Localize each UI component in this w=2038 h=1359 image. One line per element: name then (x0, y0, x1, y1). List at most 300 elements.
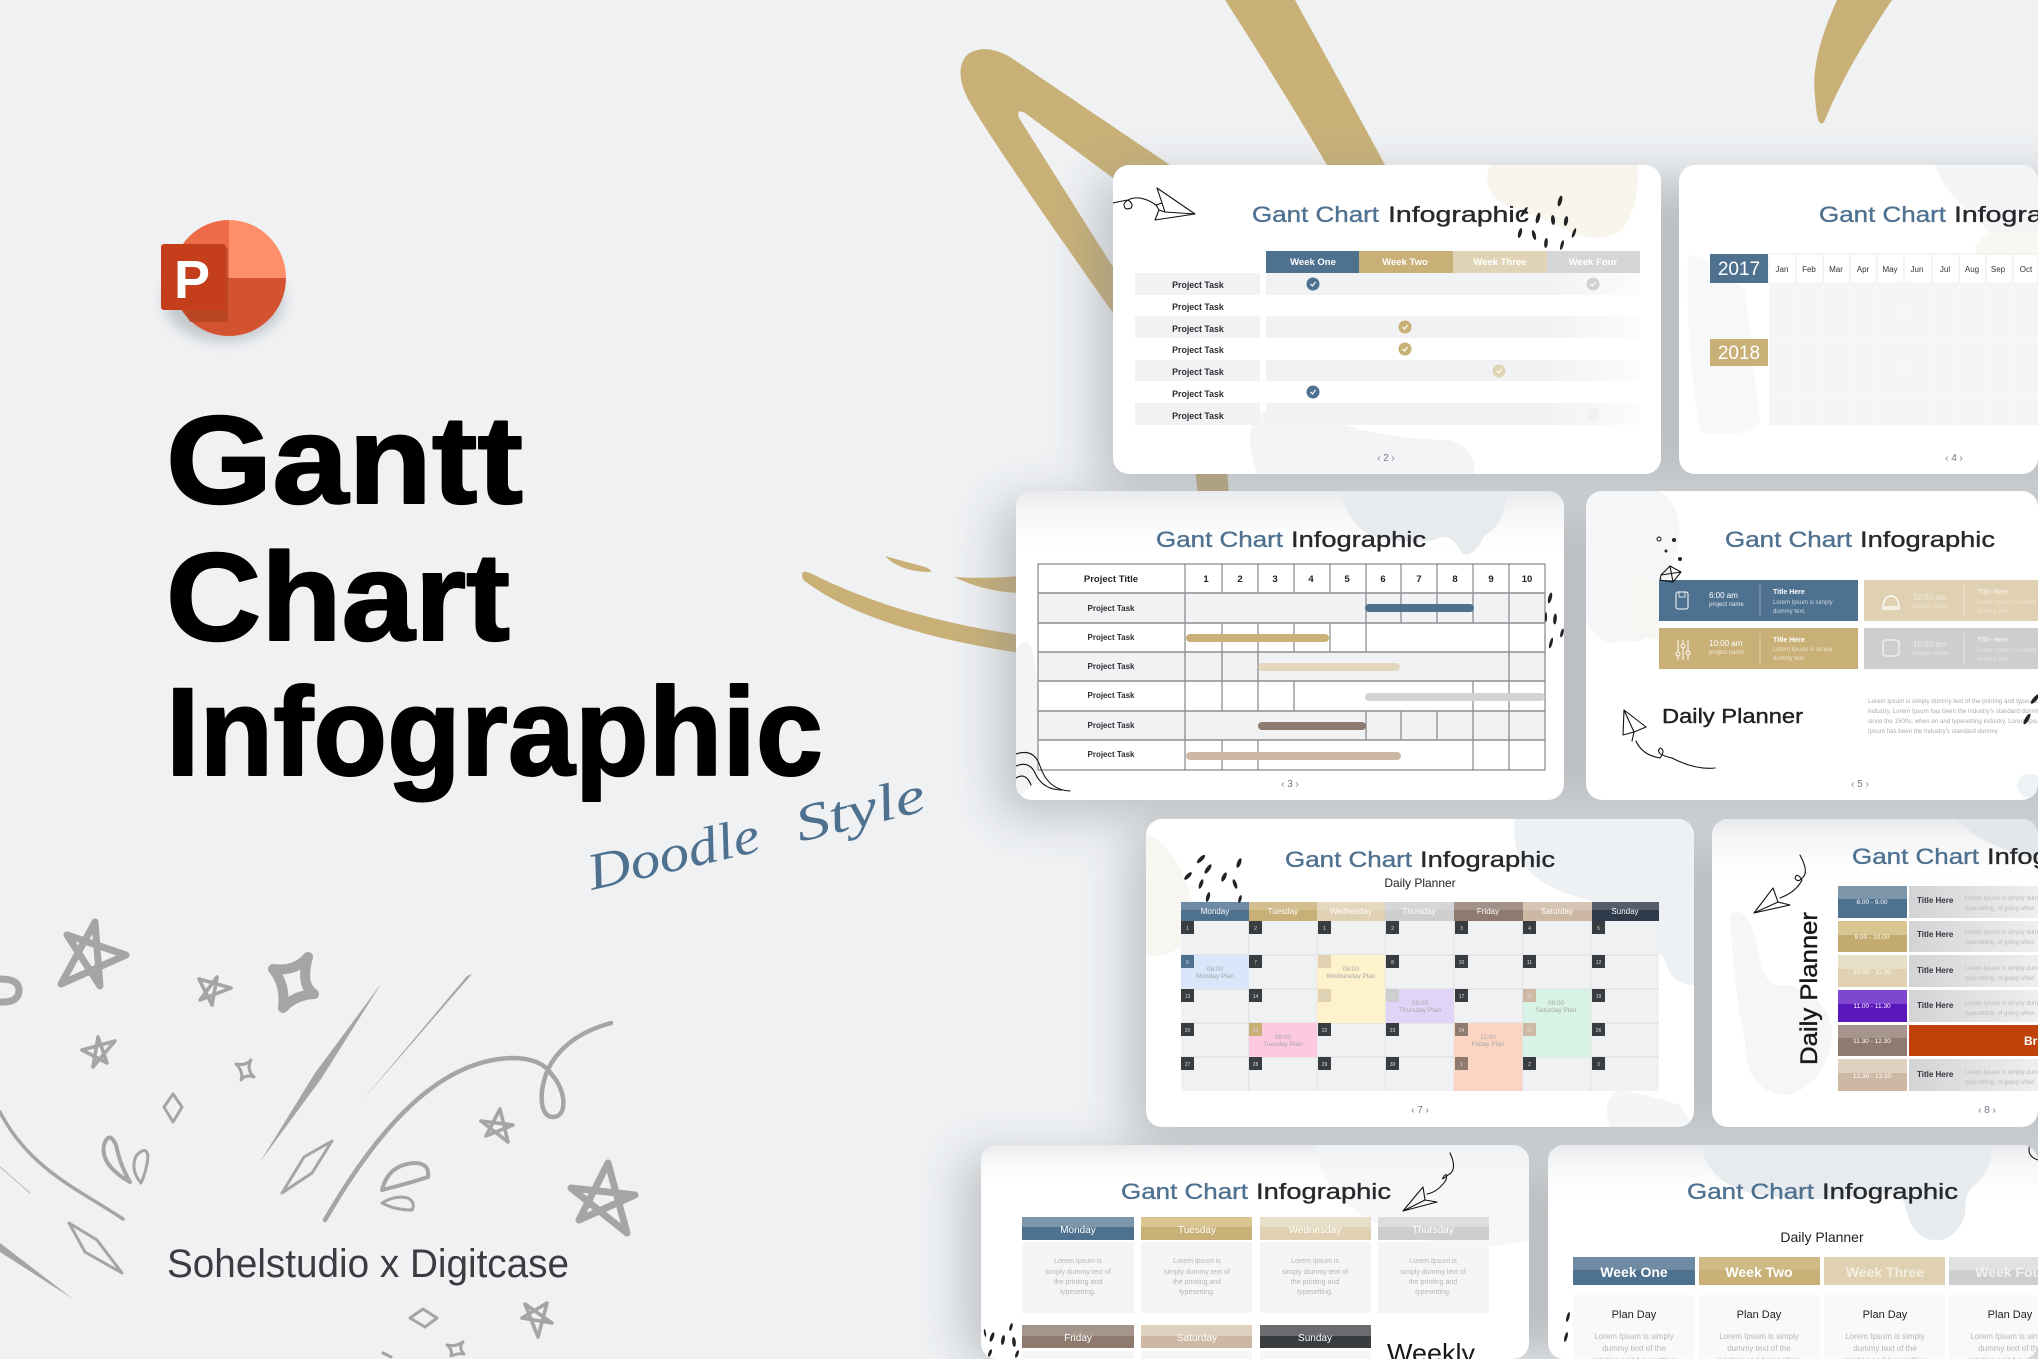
card 2 blobs (1935, 165, 2038, 254)
card 3 title: Infographic (1291, 527, 1426, 552)
subtitle: doodle style (581, 766, 931, 902)
card 7 lorem text: Lorem Ipsum is (1173, 1258, 1221, 1265)
slide card 6: daily schedule (1712, 819, 2038, 1127)
table header labels (1084, 576, 1532, 584)
calendar header: Thursday (1402, 907, 1436, 916)
card 7 weekday headers bottom: Friday (1064, 1333, 1092, 1344)
card 8 shading (1548, 1145, 2038, 1205)
tile: 6:00 am: Title Here (1773, 589, 1805, 596)
tile: 12:00 am: Title Here (1977, 589, 2009, 596)
card 7 paper plane (1403, 1153, 1454, 1211)
card 5 blobs (1146, 819, 1694, 1127)
calendar day numbers: 26 (1596, 1028, 1601, 1034)
card 1 title (1253, 206, 1528, 227)
doodle stars (61, 922, 635, 1337)
calendar day numbers: 28 (1253, 1062, 1258, 1068)
card 1 task labels: Project Task (1172, 280, 1224, 290)
schedule row text: typesetting, of going when (1965, 976, 2035, 982)
card 8 lorem text: Lorem Ipsum is simply (1594, 1332, 1674, 1341)
card 6 blobs (1730, 819, 2038, 1095)
card 1 task labels: Project Task (1172, 324, 1224, 334)
credit line: Sohelstudio x Digitcase (167, 1242, 569, 1286)
card 1 task labels: Project Task (1172, 345, 1224, 355)
card 2 month header: Jun (1911, 265, 1923, 274)
card 7 title: Gant Chart (1121, 1179, 1248, 1204)
tile: 10:00 am: project name (1709, 650, 1744, 656)
slide card 8: week plan (1548, 1145, 2038, 1359)
tile: 15:00 am: 15:00 am (1913, 640, 1947, 649)
calendar day numbers: 6 (1186, 960, 1189, 966)
card 2 month header: Aug (1965, 265, 1979, 274)
card 7 lorem text: the printing and (1291, 1279, 1339, 1286)
card 3 corner blob (1016, 642, 1042, 796)
table task labels: Project Task (1088, 750, 1135, 759)
card 2 month header: Jan (1776, 265, 1788, 274)
slide card 1: week gantt (1113, 165, 1662, 474)
tile: 10:00 am (1659, 628, 1858, 669)
card 8 panel (1548, 1145, 2038, 1359)
card 8 blob (1702, 1145, 1992, 1240)
card 7 lorem text: the printing and (1409, 1279, 1457, 1286)
table header labels: 8 (1452, 574, 1458, 585)
card 6 paper plane (1754, 855, 1805, 913)
card 3 title (1157, 530, 1426, 552)
card 8 seed marks (1563, 1312, 1571, 1342)
calendar day numbers: 7 (1254, 960, 1257, 966)
card 1 week header: Week Four (1569, 257, 1617, 268)
tile: 6:00 am: project name (1709, 602, 1744, 608)
card 1 task labels: Project Task (1172, 367, 1224, 377)
card 5 title: Infographic (1420, 847, 1555, 872)
card 2 grid (1769, 284, 2038, 425)
tile: 15:00 am: project name (1913, 651, 1948, 657)
card 8 loop doodle (2029, 1145, 2038, 1160)
card 4 seed marks (2022, 693, 2038, 725)
calendar day numbers: 11 (1527, 960, 1532, 966)
card 2 month header: May (1882, 265, 1898, 274)
card 7 shading (981, 1145, 1530, 1247)
calendar day numbers: 30 (1390, 1062, 1395, 1068)
calendar plan labels: Thursday Plan (1399, 1007, 1441, 1014)
schedule row text: typesetting, of going when (1965, 906, 2035, 912)
table header labels: 6 (1380, 574, 1386, 585)
tile: 12:00 am: project name (1913, 604, 1948, 610)
card 2 month header: Jul (1940, 265, 1950, 274)
logo circle quadrants (229, 220, 286, 278)
card 1 paper plane (1113, 188, 1195, 220)
table header labels: 1 (1203, 574, 1209, 585)
calendar plan labels: Tuesday Plan (1263, 1041, 1303, 1048)
card 4 title: Infographic (1860, 527, 1995, 552)
tile: 15:00 am: dummy text. (1977, 657, 2010, 663)
grey doodles (0, 922, 635, 1357)
calendar header: Friday (1477, 907, 1499, 916)
schedule row text: Title Here (1917, 930, 1954, 939)
tile: 12:00 am: Lorem Ipsum is simply (1977, 600, 2037, 606)
card 7 lorem text: simply dummy text of (1400, 1269, 1466, 1276)
card 8 subheading: Daily Planner (1780, 1229, 1864, 1245)
card 8 plan headings: Plan Day (1988, 1309, 2033, 1321)
card 2 panel (1679, 165, 2038, 474)
slide card 3: project table (1016, 491, 1565, 800)
card 1 task labels: Project Task (1172, 411, 1224, 421)
calendar cell fills (1181, 921, 1659, 1091)
card 8 week headers (1573, 1257, 2038, 1285)
table task labels: Project Task (1088, 691, 1135, 700)
schedule time blocks (1838, 886, 1907, 1091)
calendar day numbers: 1 (1323, 926, 1326, 932)
card 4 page number: ‹ 5 › (1851, 779, 1869, 790)
card 4 paragraph: Ipsum has been the industry's standard dummy (1868, 728, 1999, 735)
slide card 7: weekly boxes (981, 1145, 1530, 1359)
card 1 panel (1113, 165, 1661, 474)
tile: 15:00 am: Lorem Ipsum is simply (1977, 648, 2037, 654)
card 6 panel (1712, 819, 2038, 1127)
card 1 page number: ‹ 2 › (1377, 453, 1395, 464)
tile: 10:00 am: Lorem Ipsum is simply (1773, 647, 1833, 653)
card 7 lorem text: simply dummy text of (1282, 1269, 1348, 1276)
slide card 5: monthly calendar (1146, 819, 1694, 1127)
card 5 title (1285, 847, 1555, 872)
card 7 weekday headers bottom (1022, 1325, 1371, 1348)
card 3 shading (1016, 491, 1564, 518)
card 8 lorem text: Lorem Ipsum is simply (1719, 1332, 1799, 1341)
calendar plan labels: 08:00 (1207, 966, 1224, 973)
calendar day badges (1181, 921, 1605, 1070)
card 3 seed marks (1545, 592, 1565, 649)
card 5 panel (1146, 819, 1694, 1127)
card 8 plan headings: Plan Day (1863, 1309, 1908, 1321)
schedule row text: Title Here (1917, 1070, 1954, 1079)
calendar plan labels: Saturday Plan (1536, 1007, 1577, 1014)
calendar day numbers: 5 (1597, 926, 1600, 932)
card 7 lorem text: simply dummy text of (1164, 1269, 1230, 1276)
schedule time labels (1853, 899, 1892, 1080)
calendar day numbers: 24 (1459, 1028, 1464, 1034)
card 4 paper plane (1623, 710, 1715, 768)
card 7 lorem text: typesetting. (1415, 1289, 1451, 1296)
calendar plan labels: Friday Plan (1472, 1041, 1505, 1048)
card 2 month header: Oct (2020, 265, 2033, 274)
calendar plan labels: 08:00 (1412, 1000, 1429, 1007)
calendar plan labels: 08:00 (1548, 1000, 1565, 1007)
schedule row text: Title Here (1917, 896, 1954, 905)
calendar plan labels: 08:00 (1343, 966, 1360, 973)
schedule row text: typesetting, of going when (1965, 940, 2035, 946)
table header labels: 3 (1272, 574, 1278, 585)
calendar day numbers: 3 (1597, 1062, 1600, 1068)
gantt table (1038, 564, 1545, 770)
card 4 dots and gem (1657, 537, 1682, 582)
schedule time labels: 11.00 - 11.30 (1853, 1003, 1891, 1010)
table header labels: Project Title (1084, 574, 1138, 585)
schedule row text (1917, 896, 2038, 1086)
card 5 page number: ‹ 7 › (1411, 1105, 1429, 1116)
card 7 weekday headers top: Thursday (1412, 1225, 1454, 1236)
card 2 month header: Mar (1829, 265, 1843, 274)
calendar day numbers: 19 (1596, 994, 1601, 1000)
card 3 wave doodle (1016, 752, 1070, 791)
table header labels: 5 (1344, 574, 1350, 585)
card 6 title: Gant Chart (1852, 844, 1979, 869)
card drop shadows (965, 178, 2038, 1359)
calendar day numbers: 13 (1185, 994, 1190, 1000)
schedule time labels: 10.00 - 11.00 (1853, 969, 1891, 976)
card 4 title (1725, 527, 1995, 552)
subtitle: doodle style: Doodle (581, 807, 765, 902)
doodle sparkles and diamonds (69, 957, 464, 1356)
schedule time labels: 12.30 - 13.30 (1853, 1073, 1892, 1080)
card 2 month header: Apr (1857, 265, 1870, 274)
card 7 lorem text: Lorem Ipsum is (1409, 1258, 1457, 1265)
card 7 lorem text: typesetting. (1179, 1289, 1215, 1296)
calendar day numbers: 1 (1186, 926, 1189, 932)
schedule row text: typesetting, of going when (1965, 1080, 2035, 1086)
table task labels: Project Task (1088, 662, 1135, 671)
schedule time labels: 11.30 - 12.30 (1853, 1038, 1891, 1045)
table header labels: 9 (1488, 574, 1494, 585)
calendar day numbers: 7 (1323, 960, 1326, 966)
calendar day numbers: 14 (1253, 994, 1258, 1000)
card 1 title: Gant Chart (1252, 202, 1379, 227)
title line 2: Chart (166, 528, 510, 667)
calendar day numbers: 10 (1459, 960, 1464, 966)
table row fills (1038, 594, 1544, 770)
card 3 title: Gant Chart (1156, 527, 1283, 552)
card 2 year 2018 (1710, 339, 1768, 366)
card 1 grey blob (1250, 411, 1474, 474)
calendar day numbers: 12 (1596, 960, 1601, 966)
card 7 bottom-row boxes (1022, 1351, 1371, 1359)
card 2 year 2017 (1710, 254, 1768, 283)
calendar highlighted plans (1181, 955, 1591, 1091)
card 6 shading (1712, 819, 2038, 889)
calendar day numbers: 3 (1460, 926, 1463, 932)
schedule row text: Title Here (1917, 1001, 1954, 1010)
card 4 title: Gant Chart (1725, 527, 1852, 552)
card 7 weekday headers top (1022, 1217, 1489, 1240)
tile: 15:00 am: Title Here (1977, 637, 2009, 644)
calendar plan labels: Monday Plan (1196, 973, 1234, 980)
card 8 lorem text (1593, 1332, 2038, 1359)
card 3 page number: ‹ 3 › (1281, 779, 1299, 790)
tile: 6:00 am (1659, 580, 1858, 621)
table header labels: 4 (1308, 574, 1314, 585)
card 8 plan headings: Plan Day (1737, 1309, 1782, 1321)
slide card 2: year gantt (1679, 165, 2038, 474)
calendar header: Wednesday (1330, 907, 1372, 916)
card 7 lorem text: typesetting. (1060, 1289, 1096, 1296)
card 8 title: Infographic (1822, 1179, 1958, 1204)
card 7 lorem text: Lorem Ipsum is (1054, 1258, 1102, 1265)
card 1 task labels (1172, 280, 1224, 421)
title line 3: Infographic (166, 663, 823, 802)
subtitle: doodle style: Style (789, 766, 931, 854)
tile: 6:00 am: dummy text. (1773, 609, 1806, 615)
card 4 subheading: Daily Planner (1662, 706, 1803, 728)
card 7 weekday headers bottom: Saturday (1177, 1333, 1217, 1344)
calendar header: Sunday (1611, 907, 1639, 916)
card 1 track rows (1266, 273, 1596, 425)
doodle strokes (0, 974, 611, 1357)
gantt bars (1186, 604, 1545, 760)
card 2 page number: ‹ 4 › (1945, 453, 1963, 464)
schedule row text: typesetting, of going when (1965, 1011, 2035, 1017)
card 8 week headers: Week One (1600, 1264, 1668, 1280)
card 6 page number: ‹ 8 › (1978, 1105, 1996, 1116)
card 1 week header: Week One (1290, 257, 1336, 268)
schedule detail rows (1909, 886, 2038, 1091)
calendar day numbers: 2 (1254, 926, 1257, 932)
card 7 lorem text: Lorem Ipsum is (1291, 1258, 1339, 1265)
card 1 check marks (1306, 278, 1600, 398)
card 4 blobs (1586, 491, 2038, 800)
card 7 weekday headers top: Wednesday (1289, 1225, 1341, 1236)
card 1 cream blob (1487, 165, 1638, 238)
schedule row text: Title Here (1917, 966, 1954, 975)
card 2 year 2017: 2017 (1718, 259, 1760, 280)
table header labels: 2 (1237, 574, 1243, 585)
card 7 title (1121, 1179, 1391, 1204)
card 5 subheading: Daily Planner (1384, 876, 1456, 890)
calendar day numbers (1185, 926, 1601, 1068)
card 7 lorem text: the printing and (1173, 1279, 1221, 1286)
table task labels (1088, 604, 1135, 759)
calendar day numbers: 8 (1391, 960, 1394, 966)
table task labels: Project Task (1088, 721, 1135, 730)
card 8 lorem text: dummy text of the (1727, 1344, 1791, 1353)
calendar plan labels: 11:00 (1480, 1034, 1496, 1041)
calendar day numbers: 15 (1322, 994, 1327, 1000)
schedule break bar (1909, 1025, 2038, 1056)
tile: 15:00 am (1864, 628, 2038, 669)
calendar day numbers: 2 (1391, 926, 1394, 932)
tile: 6:00 am: Lorem Ipsum is simply (1773, 600, 1833, 606)
schedule time labels: 8.00 - 9.00 (1856, 899, 1888, 906)
card 1 week header: Week Three (1473, 257, 1527, 268)
tile: 10:00 am: Title Here (1773, 637, 1805, 644)
card 8 plan headings (1612, 1309, 2033, 1321)
card 1 right fade (1620, 273, 1661, 474)
card 2 month header: Sep (1991, 265, 2006, 274)
card 2 month header: Feb (1802, 265, 1816, 274)
card 3 panel (1016, 491, 1564, 800)
card 6 title (1852, 844, 2038, 869)
logo shadow (164, 258, 284, 342)
card 7 seed marks (983, 1323, 1020, 1358)
card 7 lorem text: typesetting. (1297, 1289, 1333, 1296)
card 8 week headers: Week Three (1846, 1264, 1924, 1280)
logo P letter: P (174, 250, 210, 310)
calendar day numbers: 22 (1322, 1028, 1327, 1034)
card 2 title: Gant Chart (1819, 202, 1946, 227)
card 5 title: Gant Chart (1285, 847, 1412, 872)
card 7 lorem text: simply dummy text of (1045, 1269, 1111, 1276)
calendar plan labels: Wednesday Plan (1326, 973, 1376, 980)
card 8 plan columns (1573, 1295, 2038, 1359)
card 3 blob (1344, 502, 1506, 554)
card 7 top-row text boxes (1022, 1242, 1489, 1313)
card 1 week header: Week Two (1382, 257, 1428, 268)
card 7 panel (981, 1145, 1529, 1359)
calendar plan labels (1196, 966, 1577, 1048)
tile: 10:00 am: 10:00 am (1709, 639, 1743, 648)
tile: 12:00 am: 12:00 am (1913, 593, 1947, 602)
logo P tile (161, 244, 226, 310)
calendar day numbers: 17 (1459, 994, 1464, 1000)
calendar day numbers: 1 (1460, 1062, 1463, 1068)
card 1 week header (1266, 251, 1640, 273)
card 7 weekday headers top: Tuesday (1178, 1225, 1216, 1236)
calendar day numbers: 27 (1185, 1062, 1190, 1068)
table task labels: Project Task (1088, 633, 1135, 642)
card 7 lorem text (1045, 1258, 1466, 1296)
card 8 title: Gant Chart (1687, 1179, 1814, 1204)
card 7 lorem text: the printing and (1054, 1279, 1102, 1286)
calendar day numbers: 25 (1527, 1028, 1532, 1034)
title line 1: Gantt (166, 391, 523, 530)
table grid (1038, 564, 1545, 770)
table header labels: 10 (1522, 574, 1532, 585)
card 2 month header (1769, 254, 2038, 283)
calendar day numbers: 29 (1322, 1062, 1327, 1068)
card 1 title: Infographic (1388, 202, 1529, 227)
card 8 title (1687, 1179, 1958, 1204)
card 2 year 2018: 2018 (1718, 343, 1760, 364)
calendar header: Monday (1201, 907, 1229, 916)
card 8 lorem text: Lorem Ipsum is simply (1845, 1332, 1925, 1341)
card 2 title (1820, 206, 2038, 227)
card 6 vertical heading: Daily Planner (1796, 912, 1823, 1065)
card 7 title: Infographic (1256, 1179, 1391, 1204)
calendar day numbers: 21 (1253, 1028, 1258, 1034)
tile: 6:00 am: 6:00 am (1709, 591, 1738, 600)
card 4 paragraph (1868, 698, 2038, 735)
title (166, 391, 823, 802)
card 4 panel (1586, 491, 2038, 800)
calendar header (1181, 902, 1659, 921)
calendar day numbers: 18 (1527, 994, 1532, 1000)
calendar day numbers: 16 (1390, 994, 1395, 1000)
card 8 week headers: Week Two (1725, 1264, 1793, 1280)
card 8 lorem text: dummy text of the (1602, 1344, 1666, 1353)
tile: 12:00 am: dummy text. (1977, 609, 2010, 615)
schedule time labels: 9.00 - 10.00 (1855, 934, 1890, 941)
tile: 12:00 am (1864, 580, 2038, 621)
calendar plan labels: 08:00 (1275, 1034, 1292, 1041)
card 7 weekday headers top: Monday (1060, 1225, 1096, 1236)
gold brush swooshes (802, 0, 1892, 653)
table task labels: Project Task (1088, 604, 1135, 613)
calendar header: Saturday (1541, 907, 1573, 916)
calendar day numbers: 4 (1528, 926, 1531, 932)
calendar day numbers: 20 (1185, 1028, 1190, 1034)
card 1 seed marks (1517, 195, 1577, 250)
calendar grid (1181, 902, 1659, 1091)
card 5 seed marks (1183, 854, 1243, 903)
card 1 task labels: Project Task (1172, 389, 1224, 399)
calendar day numbers: 2 (1528, 1062, 1531, 1068)
tile: 10:00 am: dummy text. (1773, 656, 1806, 662)
PowerPoint logo (161, 220, 286, 342)
card 8 lorem text: dummy text of the (1853, 1344, 1917, 1353)
slide card 4: daily planner tiles (1586, 491, 2038, 800)
table header labels: 7 (1416, 574, 1422, 585)
card 1 task column (1135, 273, 1260, 425)
calendar header: Tuesday (1268, 907, 1298, 916)
card 7 weekday headers bottom: Sunday (1298, 1333, 1332, 1344)
calendar day numbers: 23 (1390, 1028, 1395, 1034)
